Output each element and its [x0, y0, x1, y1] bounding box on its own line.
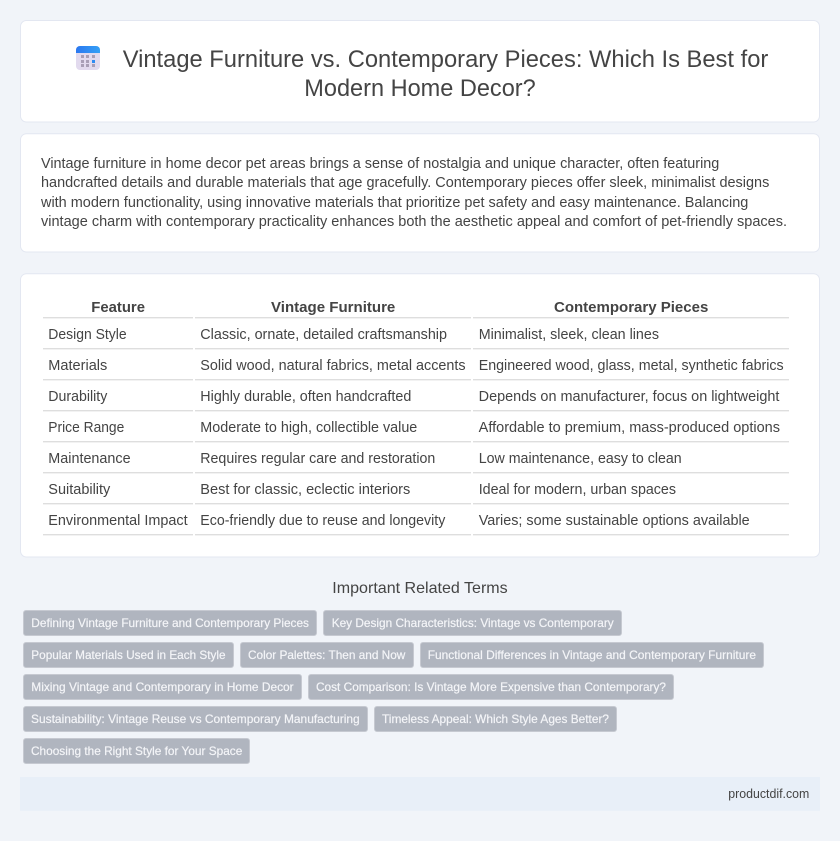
row: design style: Minimalist, sleek, clean lines	[479, 327, 659, 343]
row: materials: Engineered wood, glass, metal, synthetic fabrics	[479, 358, 784, 374]
tag: timeless: Timeless Appeal: Which Style Ages Better?	[382, 712, 609, 726]
row: design style	[43, 327, 789, 349]
footer source text: productdif.com	[728, 786, 809, 801]
table header row: Contemporary Pieces	[554, 299, 708, 316]
row: suitability: Ideal for modern, urban spaces	[479, 482, 676, 498]
row: materials	[43, 358, 789, 380]
row: suitability	[43, 482, 789, 504]
title: Vintage Furniture vs. Contemporary Pieces: Which Is Best for	[123, 46, 768, 73]
row: durability: Highly durable, often handcrafted	[200, 389, 411, 405]
tag: materials: Popular Materials Used in Each Style	[31, 648, 226, 662]
heading: important related terms: Important Related Terms	[332, 580, 508, 597]
row: maintenance: Requires regular care and restoration	[200, 451, 435, 467]
table header row	[43, 299, 789, 318]
tag: timeless	[374, 706, 616, 732]
tag: mixing: Mixing Vintage and Contemporary in Home Decor	[31, 680, 294, 694]
title: Modern Home Decor?	[304, 75, 536, 102]
row: environmental impact: Environmental Impact	[48, 513, 188, 529]
tag: functional: Functional Differences in Vintage and Contemporary Furniture	[428, 648, 756, 662]
tag list	[24, 610, 764, 764]
row: environmental impact	[43, 513, 789, 535]
row: price range: Price Range	[48, 420, 124, 436]
tag: cost: Cost Comparison: Is Vintage More Expensive than Contemporary?	[316, 680, 666, 694]
title	[123, 46, 768, 102]
row: suitability: Best for classic, eclectic interiors	[200, 482, 410, 498]
row: durability: Durability	[48, 389, 108, 405]
table header row: Feature	[91, 299, 145, 316]
row: maintenance	[43, 451, 789, 473]
row: durability	[43, 389, 789, 411]
tag: defining	[24, 610, 316, 636]
tag: color	[240, 642, 414, 668]
tag: key design: Key Design Characteristics: Vintage vs Contemporary	[332, 616, 614, 630]
row: design style: Classic, ornate, detailed craftsmanship	[200, 327, 447, 343]
row: price range: Affordable to premium, mass-produced options	[479, 420, 780, 436]
tag: sustainability: Sustainability: Vintage Reuse vs Contemporary Manufacturing	[31, 712, 360, 726]
tag: choosing	[24, 738, 250, 764]
icon: calendar	[76, 46, 100, 70]
row: price range	[43, 420, 789, 442]
tag: materials	[24, 642, 234, 668]
footer bar	[20, 777, 820, 811]
intro paragraph	[40, 156, 787, 230]
row: maintenance: Maintenance	[48, 451, 131, 467]
row: design style: Design Style	[48, 327, 127, 343]
intro paragraph: Vintage furniture in home decor pet areas brings a sense of nostalgia and unique character, often featuring	[41, 156, 719, 172]
tag: key design	[324, 610, 622, 636]
tag: functional	[420, 642, 764, 668]
tag: mixing	[24, 674, 302, 700]
panel: introduction	[20, 134, 820, 252]
tag: choosing: Choosing the Right Style for Your Space	[31, 744, 243, 758]
panel: comparison table	[20, 274, 820, 557]
row: durability: Depends on manufacturer, focus on lightweight	[479, 389, 779, 405]
tag: color: Color Palettes: Then and Now	[248, 648, 406, 662]
row: suitability: Suitability	[48, 482, 111, 498]
panel: header	[20, 20, 820, 122]
row: maintenance: Low maintenance, easy to clean	[479, 451, 682, 467]
intro paragraph: handcrafted details and durable materials that age gracefully. Contemporary pieces offer sleek, minimalist designs	[41, 175, 769, 191]
row: materials: Solid wood, natural fabrics, metal accents	[200, 358, 466, 374]
row: price range: Moderate to high, collectible value	[200, 420, 417, 436]
intro paragraph: with modern functionality, using innovative materials that prioritize pet safety and easy maintenance. Balancing	[40, 195, 748, 211]
tag: sustainability	[24, 706, 368, 732]
tag: cost	[308, 674, 674, 700]
row: materials: Materials	[48, 358, 107, 374]
row: environmental impact: Varies; some sustainable options available	[479, 513, 750, 529]
tag: defining: Defining Vintage Furniture and Contemporary Pieces	[31, 616, 309, 630]
table header row: Vintage Furniture	[271, 299, 395, 316]
intro paragraph: vintage charm with contemporary practicality enhances both the aesthetic appeal and comfort of pet-friendly spaces.	[41, 214, 787, 230]
row: environmental impact: Eco-friendly due to reuse and longevity	[200, 513, 446, 529]
